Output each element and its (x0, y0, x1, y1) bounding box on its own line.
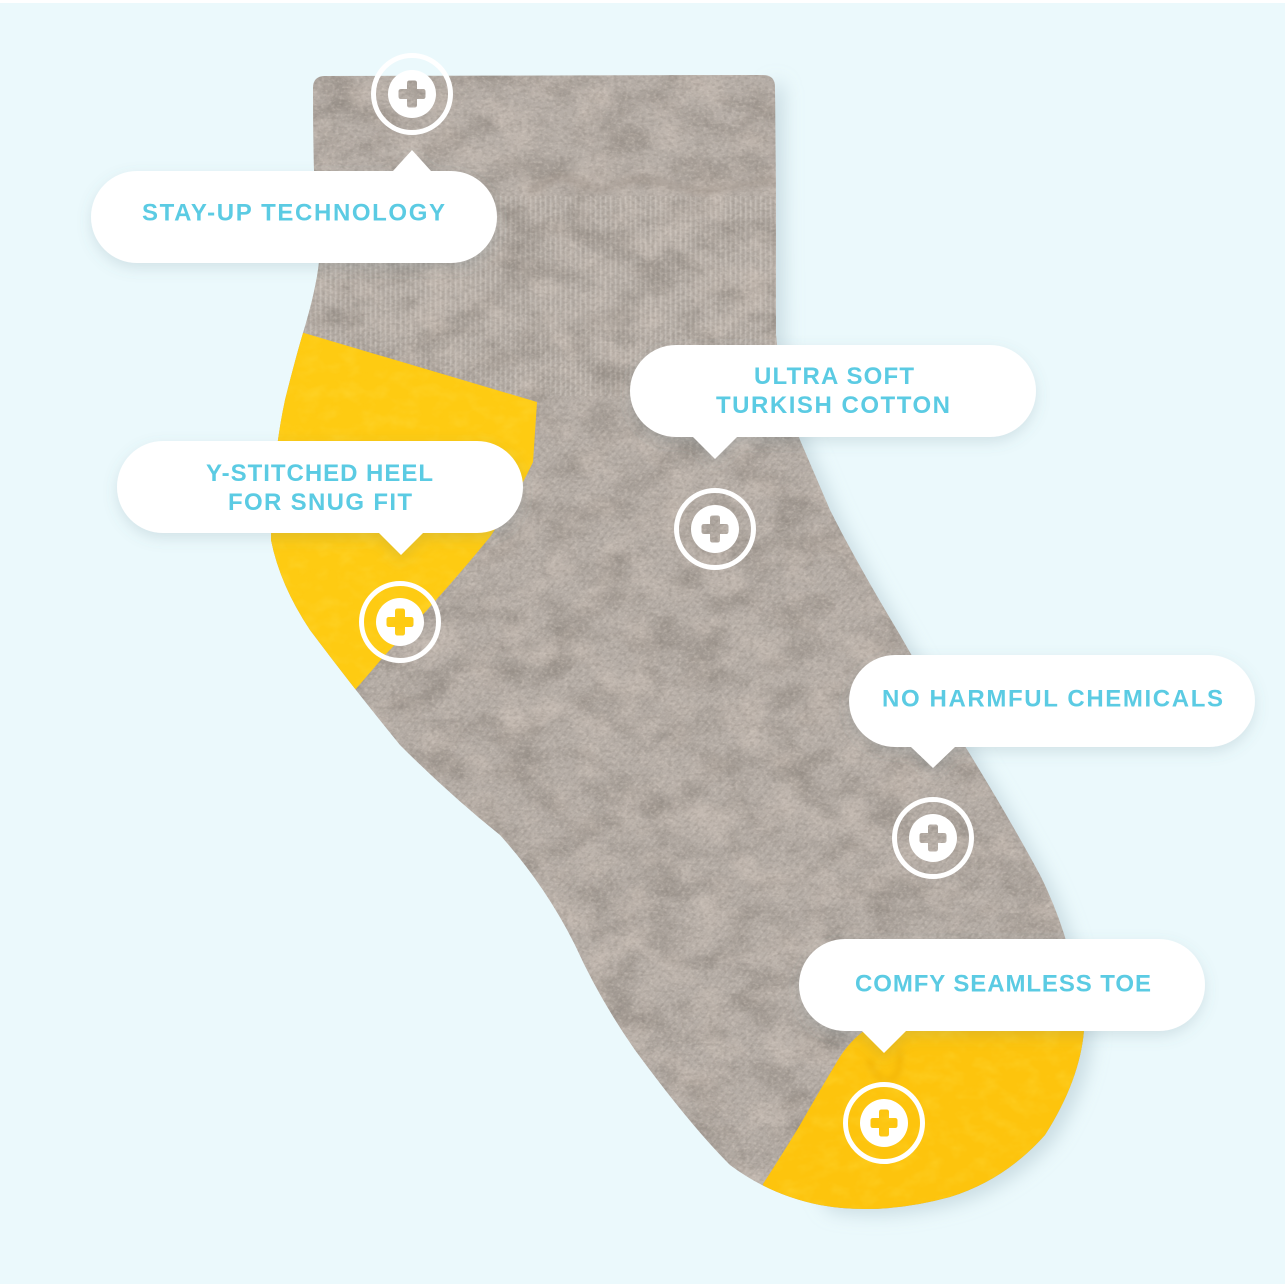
icon: plus marker, instep (676, 490, 754, 568)
callout: comfy seamless toe (799, 939, 1205, 1053)
bubble (630, 345, 1036, 459)
yellow toe (763, 1031, 1084, 1209)
sock illustration (260, 60, 1100, 1230)
toe seam shading (868, 1050, 900, 1081)
sock shadow (609, 82, 1093, 1215)
bubble (91, 150, 497, 263)
yellow heel (271, 333, 537, 690)
icon: plus marker, toe (846, 1084, 922, 1162)
bubble (849, 655, 1255, 768)
label: STAY-UP TECHNOLOGY (142, 200, 445, 226)
callout: stay-up technology (91, 150, 497, 263)
callout: ultra soft turkish cotton (630, 345, 1036, 459)
bubble (117, 441, 523, 555)
callout: y-stitched heel (117, 441, 523, 555)
icon: plus marker, cuff (374, 56, 450, 132)
label: Y-STITCHED HEEL (206, 460, 433, 487)
sock body (260, 60, 1100, 1230)
label: ULTRA SOFT (754, 363, 914, 390)
bubble (799, 939, 1205, 1053)
callout: no harmful chemicals (849, 655, 1255, 768)
label: FOR SNUG FIT (228, 489, 412, 516)
icon: plus marker, heel (362, 584, 438, 660)
cuff seam (528, 176, 776, 192)
icon: plus marker, foot (894, 800, 972, 876)
label: TURKISH COTTON (716, 392, 950, 419)
label: COMFY SEAMLESS TOE (855, 970, 1151, 998)
label: NO HARMFUL CHEMICALS (882, 686, 1223, 712)
